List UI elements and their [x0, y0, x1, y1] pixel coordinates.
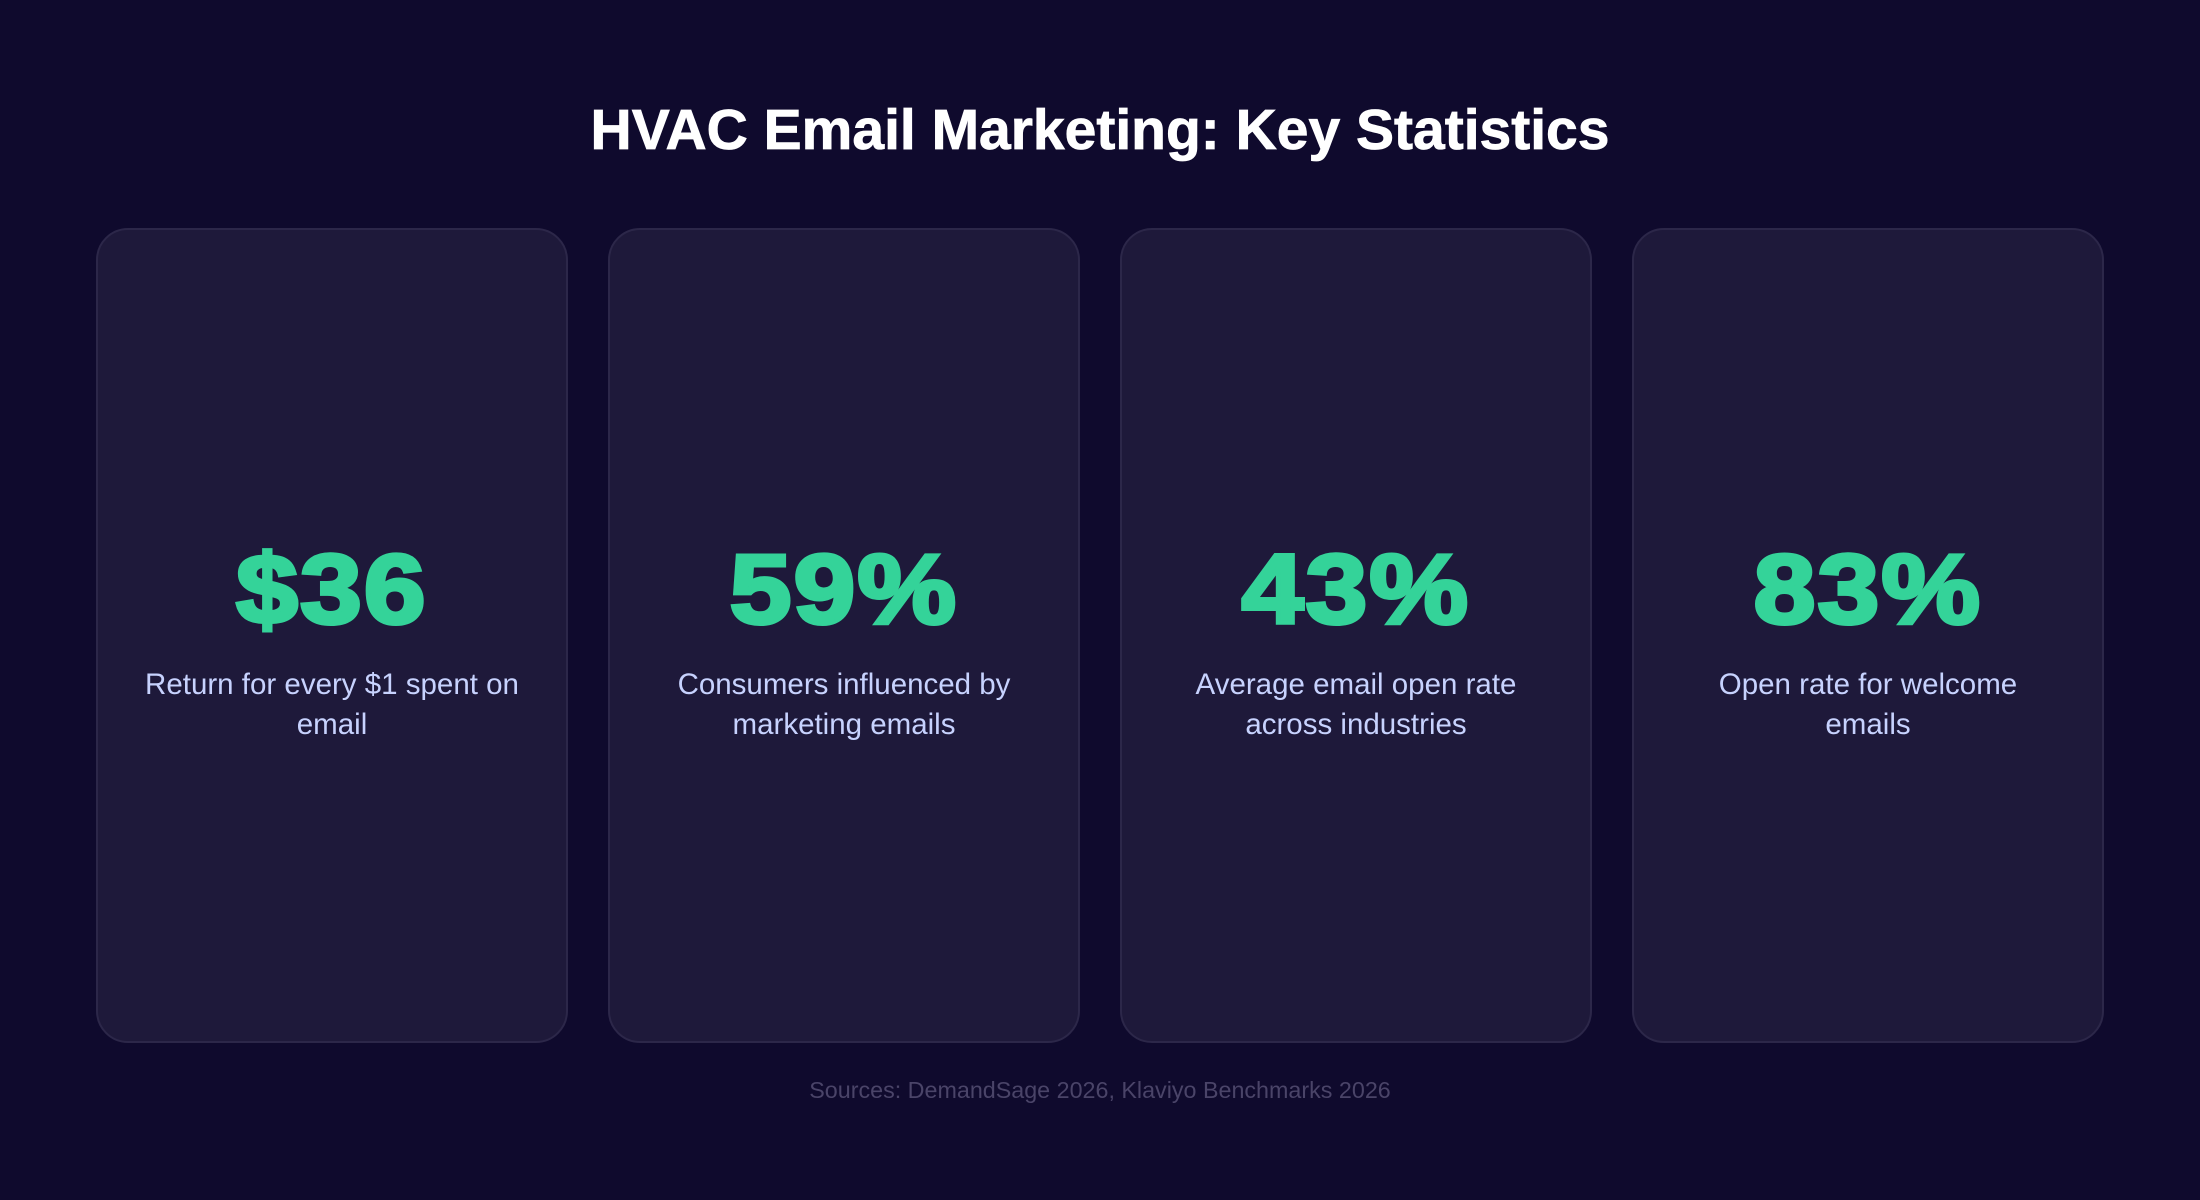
- description: consumers: marketing emails: [733, 708, 955, 741]
- stat: 43%: 43%: [1242, 534, 1470, 644]
- panel: consumers influenced: [608, 228, 1080, 1043]
- description: welcome: emails: [1825, 708, 1911, 741]
- description: welcome: [1719, 668, 2017, 741]
- description: open rate: Average email open rate: [1196, 668, 1516, 701]
- stat: $36: $36: [236, 534, 428, 644]
- panel: welcome open rate: [1632, 228, 2104, 1043]
- panel: return on spend: [96, 228, 568, 1043]
- title: HVAC Email Marketing: Key Statistics: [591, 98, 1609, 162]
- description: return: Return for every $1 spent on: [145, 668, 519, 701]
- stat: 59%: 59%: [730, 534, 958, 644]
- description: open rate: across industries: [1245, 708, 1467, 741]
- panel: average open rate: [1120, 228, 1592, 1043]
- description: welcome: Open rate for welcome: [1719, 668, 2017, 701]
- sources footer: Sources: DemandSage 2026, Klaviyo Benchmarks 2026: [809, 1077, 1391, 1103]
- description: return: email: [297, 708, 367, 741]
- description: consumers: [678, 668, 1010, 741]
- stat: 83%: 83%: [1754, 534, 1982, 644]
- description: consumers: Consumers influenced by: [678, 668, 1010, 701]
- description: return: [145, 668, 519, 741]
- description: open rate: [1196, 668, 1516, 741]
